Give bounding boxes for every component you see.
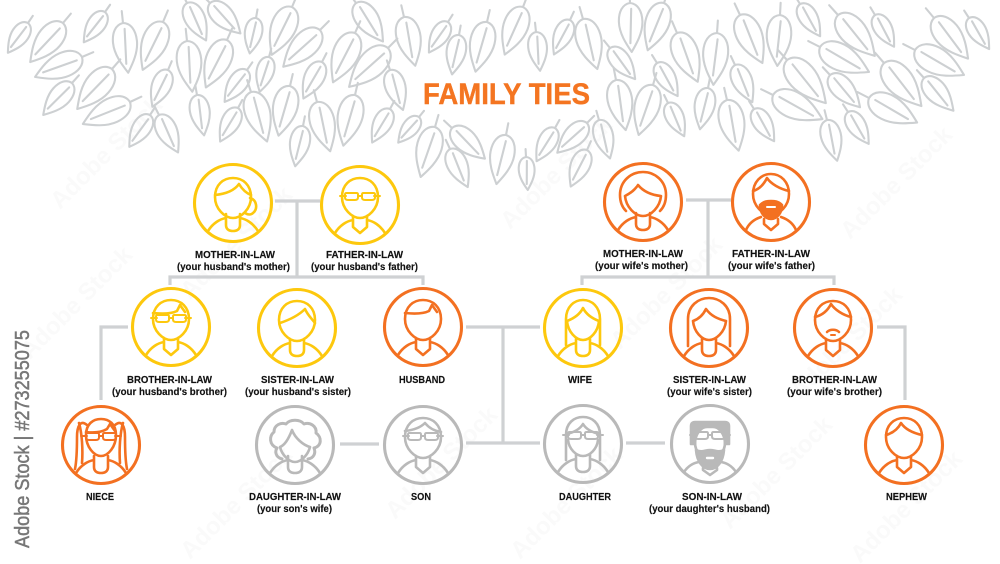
leaf canopy decoration: [1, 0, 997, 191]
person: wife: WIFE: [568, 375, 592, 386]
person: niece: [62, 406, 140, 503]
title: FAMILY TIES: [423, 78, 590, 111]
person: daughter: [544, 406, 622, 503]
person: husband's mother: [177, 164, 290, 273]
person: husband's father: FATHER-IN-LAW: [326, 250, 404, 261]
person: nephew: NEPHEW: [886, 492, 928, 503]
person: husband's sister: [245, 290, 351, 398]
person: son-in-law: [649, 406, 770, 515]
person: husband's mother: MOTHER-IN-LAW: [195, 250, 276, 261]
background watermark: Adobe Stock: [380, 401, 503, 524]
person: wife's brother: BROTHER-IN-LAW: [792, 375, 878, 386]
person: son: [384, 406, 462, 503]
person: daughter-in-law: DAUGHTER-IN-LAW: [249, 492, 342, 503]
person: son-in-law: SON-IN-LAW: [682, 492, 743, 503]
person: wife's father: FATHER-IN-LAW: [732, 249, 811, 260]
person: wife's father: [728, 164, 815, 272]
background watermark: Adobe Stock: [175, 181, 298, 304]
background watermark: Adobe Stock: [175, 441, 298, 564]
person: wife's father: (your wife's father): [728, 261, 815, 272]
person: wife's mother: MOTHER-IN-LAW: [603, 249, 684, 260]
person: husband's brother: BROTHER-IN-LAW: [127, 375, 213, 386]
background watermark: Adobe Stock: [835, 121, 958, 244]
person: wife's sister: (your wife's sister): [667, 387, 752, 398]
person: son: SON: [411, 492, 431, 503]
background watermark: Adobe Stock: [785, 281, 908, 404]
background watermark: Adobe Stock: [715, 411, 838, 534]
person: husband's father: (your husband's father): [311, 262, 418, 273]
person: husband's sister: SISTER-IN-LAW: [261, 375, 335, 386]
person: wife's sister: SISTER-IN-LAW: [673, 375, 747, 386]
background watermark: Adobe Stock: [15, 241, 138, 364]
person: husband: [384, 288, 462, 386]
person: daughter-in-law: (your son's wife): [257, 504, 332, 515]
person: wife: [544, 290, 622, 386]
person: wife's mother: [595, 164, 688, 272]
stock credit vertical text: Adobe Stock | #273255075: [12, 330, 34, 548]
person: wife's brother: [787, 290, 882, 398]
background watermark: [15, 91, 968, 564]
background watermark: Adobe Stock: [505, 441, 628, 564]
person: wife's mother: (your wife's mother): [595, 261, 688, 272]
person: wife's sister: [667, 290, 752, 398]
person: son-in-law: (your daughter's husband): [649, 504, 770, 515]
person: husband's brother: (your husband's brother): [112, 387, 227, 398]
person: nephew: [866, 406, 942, 503]
person: daughter-in-law: [249, 406, 342, 515]
person: wife's brother: (your wife's brother): [787, 387, 882, 398]
person: husband's mother: (your husband's mother): [177, 262, 290, 273]
person: husband's brother: [112, 288, 227, 398]
person: daughter: DAUGHTER: [559, 492, 612, 503]
connector lines: [101, 200, 905, 444]
person: husband: HUSBAND: [399, 375, 445, 386]
person: husband's sister: (your husband's sister): [245, 387, 351, 398]
background watermark: Adobe Stock: [495, 111, 618, 234]
person: niece: NIECE: [86, 492, 114, 503]
person: husband's father: [311, 166, 418, 273]
background watermark: Adobe Stock: [45, 91, 168, 214]
background watermark: Adobe Stock: [605, 231, 728, 354]
